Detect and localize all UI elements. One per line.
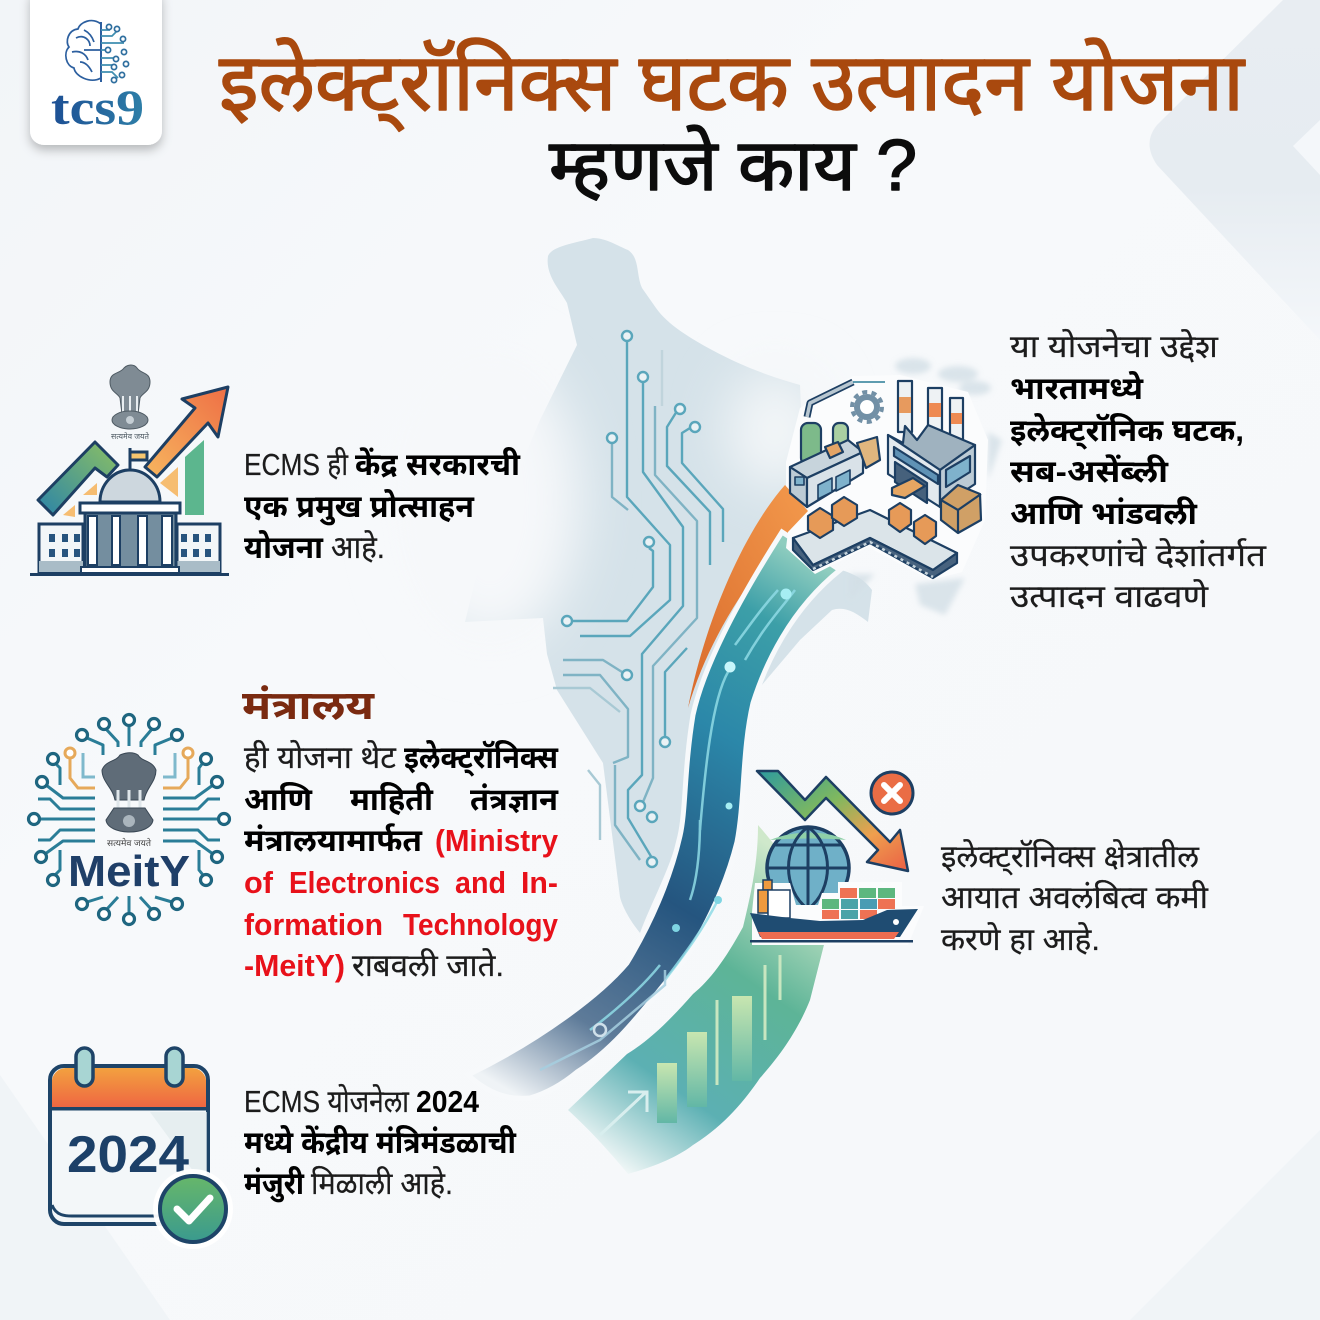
text block: ministry: and <box>455 865 506 900</box>
road ribbon <box>468 532 840 1098</box>
text block: ministry: मंत्रालयामार्फत <box>244 823 423 858</box>
title <box>219 37 1245 206</box>
text block: scheme: ECMS ही <box>244 447 349 482</box>
text block: ministry: राबवली जाते. <box>352 948 504 983</box>
icon: government building with growth arrow <box>30 365 229 576</box>
heading: ministry: मंत्रालय <box>242 684 375 728</box>
text block: objective: सब-असेंब्ली <box>1010 454 1169 489</box>
icon: national emblem: सत्यमेव जयते <box>107 837 152 848</box>
text block: objective: उपकरणांचे देशांतर्गत <box>1010 538 1267 573</box>
icon: MeitY circuit emblem <box>28 714 230 924</box>
orange ribbon <box>688 485 810 708</box>
text block: approval <box>244 1084 517 1203</box>
text block: ministry: तंत्रज्ञान <box>470 782 559 817</box>
map of India <box>400 238 1002 933</box>
icon: factory with conveyor <box>786 375 988 580</box>
icon: national emblem: सत्यमेव जयते <box>111 432 149 441</box>
text block: objective <box>1010 329 1267 614</box>
icon: calendar 2024 <box>50 1048 233 1249</box>
factory white halo <box>786 375 988 580</box>
text block: imports: करणे हा आहे. <box>941 922 1100 957</box>
text block: ministry: Technology <box>403 907 559 942</box>
text block: scheme <box>244 447 521 565</box>
text block: ministry: -MeitY) <box>244 948 345 983</box>
text block: objective: उत्पादन वाढवणे <box>1010 579 1209 614</box>
text block: ministry: आणि <box>244 782 313 817</box>
subtitle: म्हणजे काय ? <box>549 124 917 206</box>
text block: ministry: इलेक्ट्रॉनिक्स <box>404 740 559 776</box>
ship white halo <box>752 882 924 945</box>
logo wordmark: tcs9 <box>51 79 144 135</box>
text block: ministry: (Ministry <box>435 823 559 858</box>
text block: ministry: In- <box>521 865 558 900</box>
icon: calendar 2024: 2024 <box>67 1126 189 1184</box>
text block: objective: इलेक्ट्रॉनिक घटक, <box>1010 413 1244 449</box>
text block: scheme: एक प्रमुख प्रोत्साहन <box>244 489 475 526</box>
MeitY wordmark: MeitY <box>68 847 190 896</box>
text block: scheme: योजना <box>244 530 324 565</box>
text block: scheme: आहे. <box>331 530 385 565</box>
icon: national emblem <box>110 365 150 441</box>
text block: objective: भारतामध्ये <box>1010 371 1144 406</box>
icon: ship, globe and falling import arrow <box>750 771 924 945</box>
text block: ministry: माहिती <box>350 782 434 817</box>
text block: scheme: केंद्र सरकारची <box>355 447 521 482</box>
text block: approval: 2024 <box>416 1084 480 1119</box>
text block: approval: मध्ये केंद्रीय मंत्रिमंडळाची <box>244 1125 517 1160</box>
text block: objective: या योजनेचा उद्देश <box>1010 329 1219 364</box>
icon: brain circuit <box>66 21 129 83</box>
text block: ministry: ही योजना थेट <box>244 740 397 775</box>
text block: imports: आयात अवलंबित्व कमी <box>941 880 1209 915</box>
icon: national emblem <box>102 753 156 848</box>
text block: ministry: of <box>244 865 274 900</box>
text block: approval: मिळाली आहे. <box>311 1166 453 1201</box>
title: इलेक्ट्रॉनिक्स घटक उत्पादन योजना <box>219 37 1245 132</box>
text block: imports <box>941 839 1209 957</box>
text block: imports: इलेक्ट्रॉनिक्स क्षेत्रातील <box>941 839 1200 875</box>
text block: ministry: Electronics <box>289 865 440 900</box>
circuit traces on map <box>553 331 723 867</box>
green ribbon with growth bars <box>568 825 827 1174</box>
logo card <box>30 0 162 145</box>
text block: approval: ECMS योजनेला <box>244 1084 410 1119</box>
text block: approval: मंजुरी <box>244 1166 305 1203</box>
text block: objective: आणि भांडवली <box>1010 496 1198 531</box>
text block: ministry <box>244 740 559 983</box>
text block: ministry: formation <box>244 907 383 942</box>
